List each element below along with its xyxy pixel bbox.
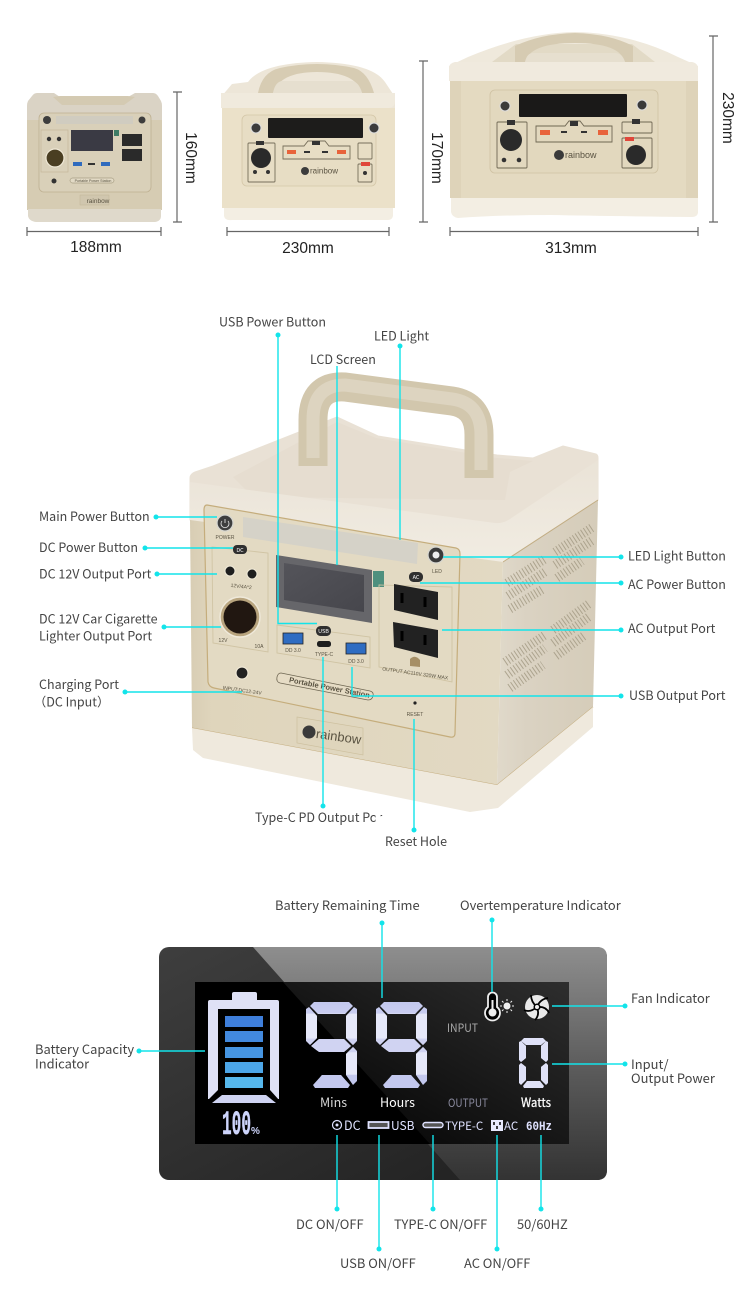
logo plate: rainbow	[315, 726, 363, 747]
digits: hours: 9	[374, 987, 429, 1099]
callout: USB Output Port: USB Output Port	[629, 685, 726, 704]
callout: Charging Port (DC Input): （DC Input）	[40, 692, 103, 710]
dimension: 188mm width	[27, 227, 161, 256]
callout: LED Light: LED Light	[374, 326, 429, 344]
product: small unit front view: rainbow	[87, 198, 110, 205]
callout: LCD Screen: LCD Screen	[310, 349, 376, 368]
charging port: INPUT:DC12-24V	[222, 685, 263, 697]
product: small unit front view	[27, 93, 162, 222]
callout: Reset Hole	[385, 719, 447, 850]
top face	[190, 417, 598, 562]
dimension: 160mm height: 160mm	[182, 132, 199, 184]
AC outlets group: AC	[413, 573, 420, 581]
callout: AC Output Port	[442, 618, 716, 637]
callout: DC ON/OFF	[296, 1135, 364, 1233]
callout: Overtemperature Indicator	[460, 895, 622, 992]
dimension: 313mm width: 313mm	[545, 240, 597, 257]
product: power station three-quarter view	[190, 385, 598, 812]
side vents	[505, 527, 593, 688]
reset hole	[407, 701, 423, 718]
DC ports group: DC	[236, 546, 244, 554]
callout: Overtemperature Indicator: Overtemperature Indicator	[460, 895, 622, 914]
status: AC	[491, 1118, 518, 1134]
status: TYPE-C	[423, 1118, 483, 1134]
callout: USB ON/OFF	[340, 1135, 416, 1272]
product: medium unit side view: rainbow	[310, 166, 338, 176]
button: LED: LED	[432, 569, 442, 575]
reset hole: RESET	[407, 712, 423, 718]
callout: USB ON/OFF: USB ON/OFF	[340, 1253, 416, 1272]
callout: DC ON/OFF: DC ON/OFF	[296, 1214, 364, 1233]
panel: LCD display diagram: 100	[222, 1107, 251, 1145]
status: TYPE-C: TYPE-C	[445, 1118, 483, 1134]
DC ports group: 10A	[255, 644, 264, 650]
status: DC: DC	[344, 1115, 361, 1134]
USB ports group	[277, 625, 370, 668]
icon: fan	[524, 995, 549, 1020]
LCD bezel	[159, 947, 607, 1180]
status: DC	[332, 1115, 361, 1134]
callout: Fan Indicator	[552, 988, 711, 1008]
USB ports group: DD 3.0	[348, 659, 364, 665]
dimension: 170mm height	[419, 61, 445, 222]
callout: Type-C PD Output Port: Type-C PD Output Port	[255, 807, 387, 826]
dimension: 230mm width: 230mm	[282, 240, 334, 257]
callout: DC 12V Car Cigarette Lighter Output Port: DC 12V Car Cigarette	[39, 608, 158, 628]
badge: Portable Power Station: Portable Power Station	[288, 675, 371, 700]
DC ports group: 12V/4A*2	[230, 583, 252, 591]
control panel	[204, 505, 460, 737]
label: Hours: Hours	[380, 1092, 415, 1111]
callout: AC Power Button	[420, 574, 726, 593]
product: large unit rear view: rainbow	[565, 150, 597, 160]
USB ports group: TYPE-C	[315, 652, 334, 658]
charging port	[222, 667, 263, 697]
callout: DC 12V Output Port	[39, 564, 217, 582]
callout: DC Power Button	[39, 537, 233, 556]
callout: Battery Capacity Indicator	[35, 1039, 205, 1072]
icon: thermometer	[485, 992, 514, 1021]
percent sign: %	[251, 1126, 260, 1137]
label: INPUT: INPUT	[447, 1020, 478, 1036]
dimension: 170mm height: 170mm	[428, 132, 445, 184]
status: AC: AC	[504, 1118, 518, 1134]
digits: minutes: 9	[304, 987, 359, 1099]
USB ports group: USB	[318, 627, 329, 635]
LED strip	[243, 517, 418, 564]
bottom cap	[192, 707, 593, 812]
callout: TYPE-C ON/OFF: TYPE-C ON/OFF	[394, 1214, 487, 1233]
status: USB	[368, 1117, 415, 1134]
callout: DC 12V Car Cigarette Lighter Output Port: Lighter Output Port	[39, 626, 152, 644]
battery gauge	[208, 992, 279, 1103]
callout: USB Power Button	[219, 312, 326, 624]
product: large unit rear view	[449, 32, 698, 218]
dimension: 188mm width: 188mm	[70, 239, 122, 256]
logo plate	[297, 717, 363, 755]
handle	[313, 387, 479, 478]
callout: Fan Indicator: Fan Indicator	[631, 988, 711, 1007]
callout: 50/60HZ	[517, 1135, 568, 1233]
AC outlets group: OUTPUT AC110V 320W MAX	[382, 666, 449, 682]
dimension: 230mm width	[227, 227, 389, 257]
callout: Main Power Button: Main Power Button	[39, 506, 150, 525]
callout: Battery Remaining Time: Battery Remaining Time	[275, 895, 420, 914]
callout: DC 12V Output Port: DC 12V Output Port	[39, 564, 152, 582]
callout: LED Light Button	[443, 546, 726, 564]
callout: LED Light Button: LED Light Button	[628, 546, 726, 564]
product: small unit front view: Portable Power Station	[75, 179, 111, 183]
status: frequency: 60Hz	[526, 1120, 552, 1134]
panel: product anatomy diagram	[39, 312, 726, 850]
dimension: 313mm width	[450, 227, 698, 257]
callout: AC ON/OFF: AC ON/OFF	[464, 1253, 530, 1272]
status: USB: USB	[391, 1117, 415, 1134]
label: Mins: Mins	[320, 1092, 347, 1111]
callout: 50/60HZ: 50/60HZ	[517, 1214, 568, 1233]
product: medium unit side view	[221, 62, 395, 220]
callout: AC ON/OFF	[464, 1135, 530, 1272]
indicator: green	[373, 571, 384, 587]
label: OUTPUT: OUTPUT	[448, 1095, 488, 1111]
callout: AC Power Button: AC Power Button	[628, 574, 726, 593]
callout: Charging Port (DC Input): Charging Port	[39, 674, 119, 693]
callout: Battery Capacity Indicator: Indicator	[35, 1054, 90, 1072]
callout: USB Power Button: USB Power Button	[219, 312, 326, 330]
callout: Reset Hole: Reset Hole	[385, 831, 447, 850]
USB ports group: DD 3.0	[285, 648, 301, 654]
callout: USB Output Port	[352, 667, 726, 704]
LCD screen	[276, 555, 372, 623]
callout: LED Light	[374, 326, 429, 540]
dimension: 230mm height	[709, 36, 736, 222]
callout: Main Power Button	[39, 506, 217, 525]
callout: DC Power Button: DC Power Button	[39, 537, 138, 556]
AC outlets group	[379, 572, 452, 682]
DC ports group: 12V	[219, 638, 228, 644]
callout: AC Output Port: AC Output Port	[628, 618, 716, 637]
callout: DC 12V Car Cigarette Lighter Output Port	[39, 608, 221, 644]
label: Watts: Watts	[521, 1092, 551, 1111]
callout: Input/Output Power: Input/	[631, 1054, 669, 1073]
body side face	[497, 500, 598, 785]
callout: Charging Port (DC Input)	[39, 674, 242, 710]
DC ports group	[212, 545, 268, 652]
button: LED	[428, 547, 444, 575]
callout: Input/Output Power: Output Power	[631, 1068, 716, 1087]
dimension: 160mm height	[173, 92, 199, 222]
callout: Input/Output Power	[552, 1054, 716, 1087]
callout: Battery Capacity Indicator: Battery Capacity	[35, 1039, 134, 1058]
panel: size comparison	[27, 32, 736, 257]
button: power: POWER	[216, 535, 235, 541]
body front face	[190, 520, 503, 785]
callout: Battery Remaining Time	[275, 895, 420, 998]
dimension: 230mm height: 230mm	[719, 92, 736, 144]
button: power	[216, 515, 235, 541]
panel: LCD display diagram	[35, 895, 716, 1272]
callout: Type-C PD Output Port	[255, 657, 396, 828]
callout: TYPE-C ON/OFF	[394, 1135, 487, 1233]
digit: watts: 0	[518, 1030, 549, 1092]
